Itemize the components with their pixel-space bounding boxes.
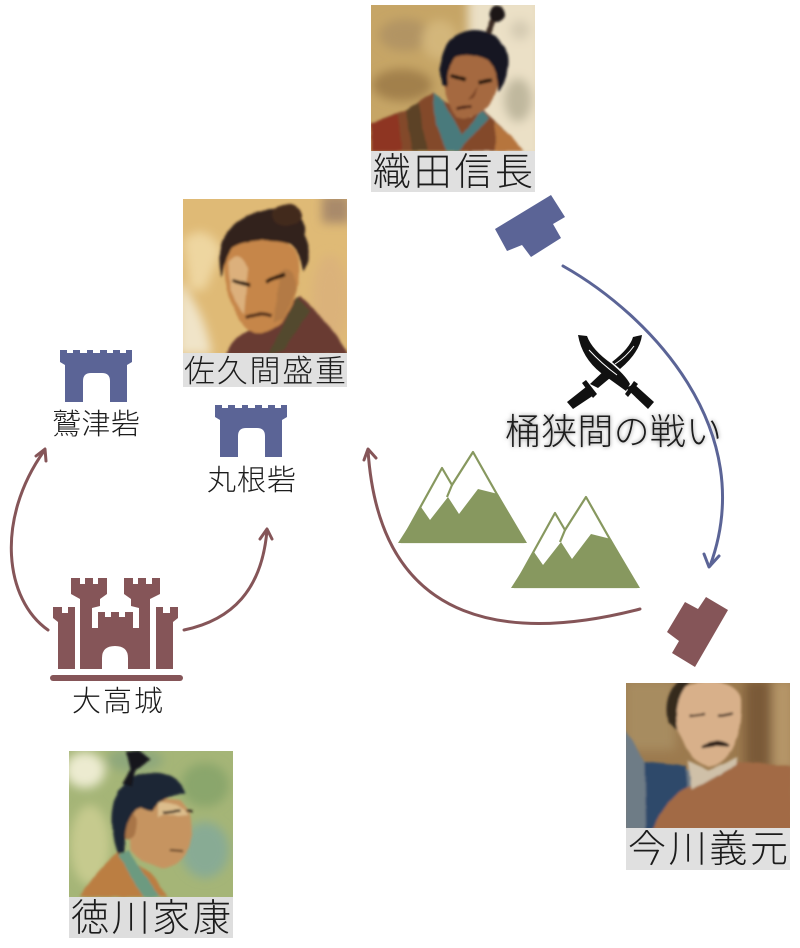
icon: Odaka castle xyxy=(50,578,183,718)
title: Battle of Okehazama: 桶狭間の戦い xyxy=(505,411,722,452)
title: Battle of Okehazama: 桶狭間の戦い xyxy=(505,411,722,452)
name label: Nobunaga: 織田信長 xyxy=(373,152,533,194)
label: Marune fort: 丸根砦 xyxy=(207,464,296,497)
icon: Oda army unit marker xyxy=(495,195,565,257)
icon: Imagawa army unit marker xyxy=(667,597,728,667)
icon: crossed swords xyxy=(567,335,654,409)
arrow: Oda advance xyxy=(563,266,723,567)
icon: Washizu fort xyxy=(52,350,140,441)
portrait: Tokugawa Ieyasu xyxy=(65,748,233,940)
arrow: Odaka to Marune xyxy=(184,529,272,630)
name label: Yoshimoto: 今川義元 xyxy=(628,829,788,871)
arrow: Odaka to Washizu xyxy=(11,449,48,630)
portrait: Oda Nobunaga xyxy=(371,0,543,194)
icon: mountains right xyxy=(511,497,640,588)
arrow: Imagawa advance xyxy=(364,449,640,623)
icon: Marune fort xyxy=(207,405,296,497)
portrait: Sakuma Morishige xyxy=(178,195,350,389)
name label: Ieyasu: 徳川家康 xyxy=(71,898,231,940)
name label: Sakuma: 佐久間盛重 xyxy=(184,354,346,389)
portrait: Imagawa Yoshimoto xyxy=(624,680,794,871)
icon: mountains left xyxy=(398,452,527,543)
label: Odaka castle: 大高城 xyxy=(72,685,163,718)
label: Washizu fort: 鷲津砦 xyxy=(52,408,140,441)
